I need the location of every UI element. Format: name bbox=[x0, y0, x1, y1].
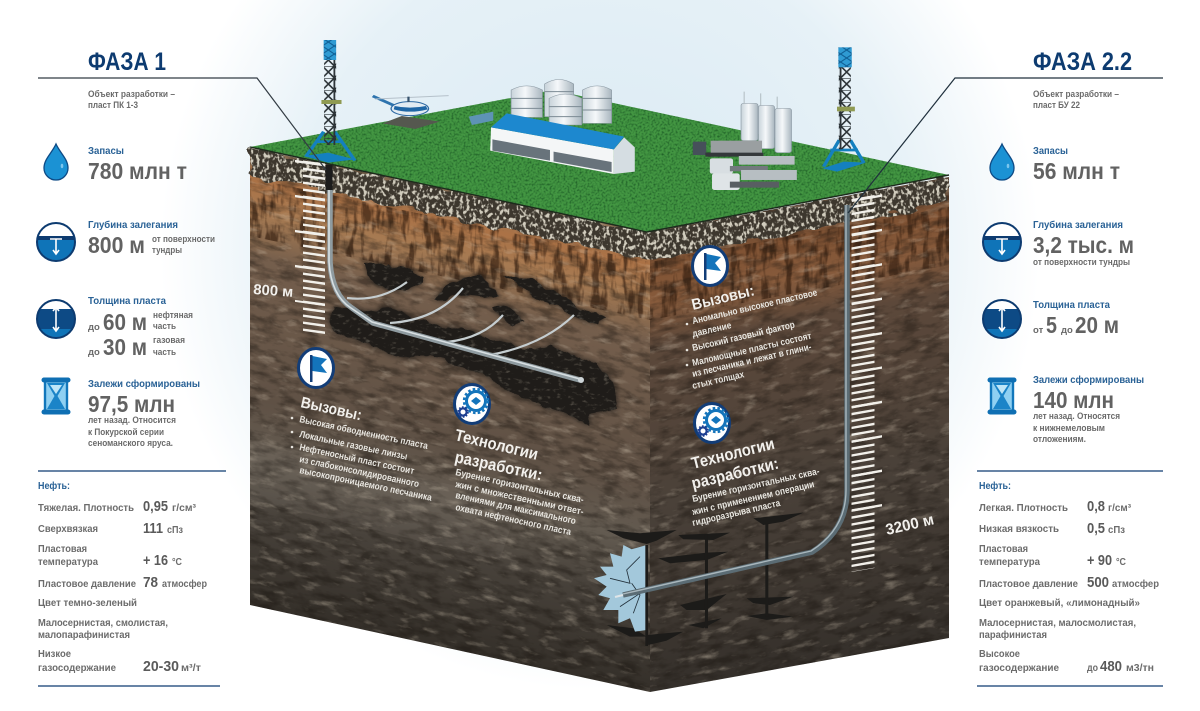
well: phase 1 horizontal with branches bbox=[329, 165, 584, 383]
container bbox=[469, 112, 493, 125]
thickness: 5 bbox=[1046, 312, 1057, 338]
oil table: phase 2.2: Малосернистая, малосмолистая, bbox=[979, 618, 1136, 629]
thickness bbox=[88, 295, 193, 360]
oil table: phase 1: Сверхвязкая bbox=[38, 524, 98, 535]
reserves bbox=[88, 145, 187, 184]
helipad bbox=[383, 116, 440, 129]
thickness: нефтяная bbox=[153, 310, 193, 321]
description: влениями для максимального bbox=[454, 490, 577, 527]
oil table: phase 2.2: Низкая вязкость bbox=[979, 524, 1059, 535]
oil table: phase 2.2: + 90 bbox=[1087, 553, 1112, 569]
formation age: 140 млн bbox=[1033, 387, 1114, 413]
description: жин с применением операции bbox=[690, 479, 816, 518]
formation age: к Покурской серии bbox=[88, 427, 164, 438]
thickness: 20 м bbox=[1075, 312, 1119, 338]
icon: thickness bbox=[36, 299, 76, 339]
depth: Глубина залегания bbox=[88, 219, 178, 231]
right panel: phase 2.2 bbox=[982, 48, 1144, 445]
depth: Глубина залегания bbox=[1033, 219, 1123, 231]
icon: depth bbox=[36, 222, 76, 262]
formation age: к нижнемеловым bbox=[1033, 423, 1105, 434]
object note: пласт ПК 1-3 bbox=[88, 100, 138, 111]
bullet list: давление bbox=[691, 320, 733, 340]
heading bbox=[453, 426, 544, 484]
towers right bbox=[741, 92, 791, 153]
bullet list: Высокий газовый фактор bbox=[691, 320, 796, 354]
oil table: phase 2.2: сПз bbox=[1108, 525, 1125, 536]
hydraulic fracture bbox=[594, 545, 647, 632]
title: ФАЗА 1 bbox=[88, 48, 166, 76]
tanks bbox=[511, 79, 612, 125]
description bbox=[690, 466, 821, 529]
depth scale: phase 2.2 bbox=[863, 197, 867, 570]
thickness: газовая bbox=[153, 335, 185, 346]
formation age: сеноманского яруса. bbox=[88, 438, 173, 449]
oil table: phase 1: Низкое bbox=[38, 649, 71, 660]
bullet list: из слабоконсолидированного bbox=[298, 454, 420, 490]
thickness: от bbox=[1033, 325, 1044, 336]
oil table: phase 2.2: г/см³ bbox=[1108, 503, 1132, 514]
icon: flag bbox=[298, 348, 334, 388]
surface: green ground bbox=[250, 90, 949, 232]
oil table: phase 1: малопарафинистая bbox=[38, 629, 130, 641]
bullet list bbox=[686, 287, 818, 392]
heading: Технологии bbox=[690, 435, 776, 473]
warehouse building bbox=[490, 113, 635, 174]
oil table: phase 2.2: Цвет оранжевый, «лимонадный» bbox=[979, 598, 1140, 609]
gravel layer bbox=[250, 148, 949, 260]
oil table: phase 1: 111 bbox=[143, 521, 163, 537]
oil table: phase 2.2: 480 bbox=[1100, 659, 1122, 675]
bullet list: Локальные газовые линзы bbox=[298, 429, 408, 463]
oil table: phase 1 bbox=[38, 471, 226, 686]
thickness: до bbox=[1061, 325, 1073, 336]
panel: challenges phase 2.2 bbox=[686, 246, 818, 392]
leader line: phase 1 bbox=[38, 78, 326, 170]
bullet list: высокопроницаемого песчаника bbox=[298, 465, 433, 504]
icon: drop bbox=[44, 144, 68, 180]
object note: Объект разработки – bbox=[1033, 89, 1119, 100]
thickness: Толщина пласта bbox=[88, 295, 166, 307]
heading: Вызовы: bbox=[690, 282, 756, 314]
oil table: phase 2.2: 0,8 bbox=[1087, 499, 1105, 515]
leader line: phase 2.2 bbox=[848, 78, 1163, 213]
bullet list: Аномально высокое пластовое bbox=[691, 287, 818, 327]
oil table: phase 1: Цвет темно-зеленый bbox=[38, 598, 137, 609]
left soil face bbox=[250, 140, 650, 700]
bullet list bbox=[291, 414, 433, 504]
formation age: Залежи сформированы bbox=[1033, 374, 1144, 386]
depth label 800 m: 800 м bbox=[253, 282, 294, 301]
bullet list: Высокая обводненность пласта bbox=[298, 414, 429, 452]
depth label 3200 m: 3200 м bbox=[884, 511, 936, 539]
oil table: phase 1: Малосернистая, смолистая, bbox=[38, 618, 168, 629]
oil table: phase 1: 0,95 bbox=[143, 499, 168, 515]
icon: depth bbox=[982, 222, 1022, 262]
object note bbox=[1033, 89, 1119, 111]
reserves: Запасы bbox=[88, 145, 124, 157]
oil table: phase 2.2: 0,5 bbox=[1087, 521, 1105, 537]
oil table: phase 2.2: до bbox=[1087, 663, 1098, 674]
reserves: 780 млн т bbox=[88, 158, 187, 184]
thickness bbox=[1033, 299, 1119, 338]
oil table: phase 1: + 16 bbox=[143, 553, 168, 569]
oil table: phase 2.2: Пластовое давление bbox=[979, 579, 1078, 590]
description: жин с множественными ответ- bbox=[453, 479, 585, 518]
oil table: phase 2.2: Пластовая bbox=[979, 544, 1028, 555]
formation age: лет назад. Относятся bbox=[1033, 411, 1120, 422]
reserves bbox=[1033, 145, 1120, 184]
thickness: часть bbox=[153, 321, 176, 332]
oil table: phase 2.2: атмосфер bbox=[1112, 578, 1159, 590]
reserves: Запасы bbox=[1033, 145, 1068, 157]
object note bbox=[88, 89, 175, 111]
right soil face bbox=[650, 170, 950, 700]
icon: thickness bbox=[982, 299, 1022, 339]
oil table: phase 2.2: газосодержание bbox=[979, 663, 1059, 674]
oil table: phase 2.2: °C bbox=[1116, 557, 1126, 568]
reserves: 56 млн т bbox=[1033, 158, 1120, 184]
heading bbox=[690, 435, 780, 493]
description: охвата нефтеносного пласта bbox=[454, 502, 573, 538]
coal lenses: phase 1 reservoir bbox=[330, 263, 617, 427]
oil table: phase 2.2: 500 bbox=[1087, 575, 1109, 591]
icon: hourglass bbox=[988, 378, 1016, 414]
depth: от поверхности тундры bbox=[1033, 257, 1130, 268]
oil table: phase 1: Пластовая bbox=[38, 544, 87, 555]
formation age: отложениям. bbox=[1033, 434, 1086, 445]
panel: technologies phase 1 bbox=[453, 384, 585, 538]
formation age: 97,5 млн bbox=[88, 391, 175, 417]
oil table: phase 1: °C bbox=[172, 557, 182, 568]
depth: 800 м bbox=[88, 232, 145, 258]
oil table: phase 1: г/см³ bbox=[172, 503, 197, 514]
oil table: phase 2.2: м3/тн bbox=[1126, 663, 1154, 674]
bullet list: Маломощные пласты состоят bbox=[691, 331, 813, 369]
thickness: Толщина пласта bbox=[1033, 299, 1110, 311]
bullet list: стых толщах bbox=[691, 369, 746, 392]
object note: пласт БУ 22 bbox=[1033, 100, 1080, 111]
depth bbox=[1033, 219, 1134, 268]
title: ФАЗА 2.2 bbox=[1033, 48, 1132, 76]
trucks bbox=[693, 141, 797, 190]
oil table: phase 1: Пластовое давление bbox=[38, 579, 136, 590]
left drilling rig bbox=[304, 40, 355, 163]
panel: challenges phase 1 bbox=[291, 348, 433, 504]
oil table: phase 1: Нефть: bbox=[38, 480, 70, 492]
fracture zone: phase 2.2 bbox=[594, 513, 803, 646]
icon: gears bbox=[694, 404, 730, 442]
thickness: часть bbox=[153, 347, 176, 358]
oil table: phase 1: м³/т bbox=[181, 663, 201, 674]
thickness: 60 м bbox=[103, 309, 147, 335]
helicopter bbox=[373, 96, 449, 116]
thickness: до bbox=[88, 347, 100, 358]
object note: Объект разработки – bbox=[88, 89, 175, 100]
description: Бурение горизонтальных сква- bbox=[454, 467, 585, 506]
panel: technologies phase 2.2 bbox=[690, 404, 821, 529]
depth: 3,2 тыс. м bbox=[1033, 232, 1134, 258]
left panel: phase 1 bbox=[36, 48, 215, 449]
surface facilities bbox=[304, 40, 866, 190]
oil table: phase 2.2 bbox=[977, 471, 1163, 686]
oil table: phase 1: 78 bbox=[143, 575, 158, 591]
bullet list: из песчаника и лежат в глини- bbox=[691, 342, 813, 380]
depth scale: phase 1 bbox=[310, 162, 314, 336]
formation age bbox=[88, 378, 200, 449]
oil table: phase 1: атмосфер bbox=[162, 578, 207, 590]
oil table: phase 1: температура bbox=[38, 557, 98, 568]
lenses and fractures bbox=[607, 513, 803, 645]
formation age: лет назад. Относится bbox=[88, 415, 176, 426]
heading: разработки: bbox=[453, 448, 544, 484]
well: phase 2.2 bbox=[615, 205, 847, 597]
depth bbox=[88, 219, 215, 258]
oil table: phase 2.2: парафинистая bbox=[979, 629, 1047, 641]
heading: Вызовы: bbox=[299, 394, 363, 424]
bullet list: Нефтеносный пласт состоит bbox=[298, 442, 415, 477]
oil table: phase 1: 20-30 bbox=[143, 659, 179, 675]
block diagram: soil cube bbox=[250, 140, 950, 700]
thickness: до bbox=[88, 322, 100, 333]
description bbox=[453, 467, 585, 538]
oil table: phase 2.2: Нефть: bbox=[979, 480, 1011, 492]
icon: drop bbox=[990, 144, 1014, 180]
depth: тундры bbox=[152, 245, 182, 256]
oil table: phase 1: сПз bbox=[167, 525, 183, 536]
icon: hourglass bbox=[42, 378, 70, 414]
icon: gears bbox=[454, 384, 490, 424]
oil table: phase 1: Тяжелая. Плотность bbox=[38, 503, 134, 514]
description: гидроразрыва пласта bbox=[691, 498, 782, 529]
heading: Технологии bbox=[453, 426, 540, 464]
formation age bbox=[1033, 374, 1144, 445]
depth: от поверхности bbox=[152, 234, 215, 245]
oil table: phase 2.2: Легкая. Плотность bbox=[979, 503, 1068, 514]
surface edge bbox=[250, 147, 949, 232]
oil table: phase 2.2: температура bbox=[979, 557, 1040, 568]
formation age: Залежи сформированы bbox=[88, 378, 200, 390]
heading: разработки: bbox=[690, 455, 780, 493]
description: Бурение горизонтальных сква- bbox=[691, 466, 821, 505]
thickness: 30 м bbox=[103, 334, 147, 360]
right drilling rig bbox=[822, 47, 866, 172]
icon: flag bbox=[692, 246, 728, 286]
oil table: phase 2.2: Высокое bbox=[979, 649, 1020, 660]
oil table: phase 1: газосодержание bbox=[38, 663, 116, 674]
